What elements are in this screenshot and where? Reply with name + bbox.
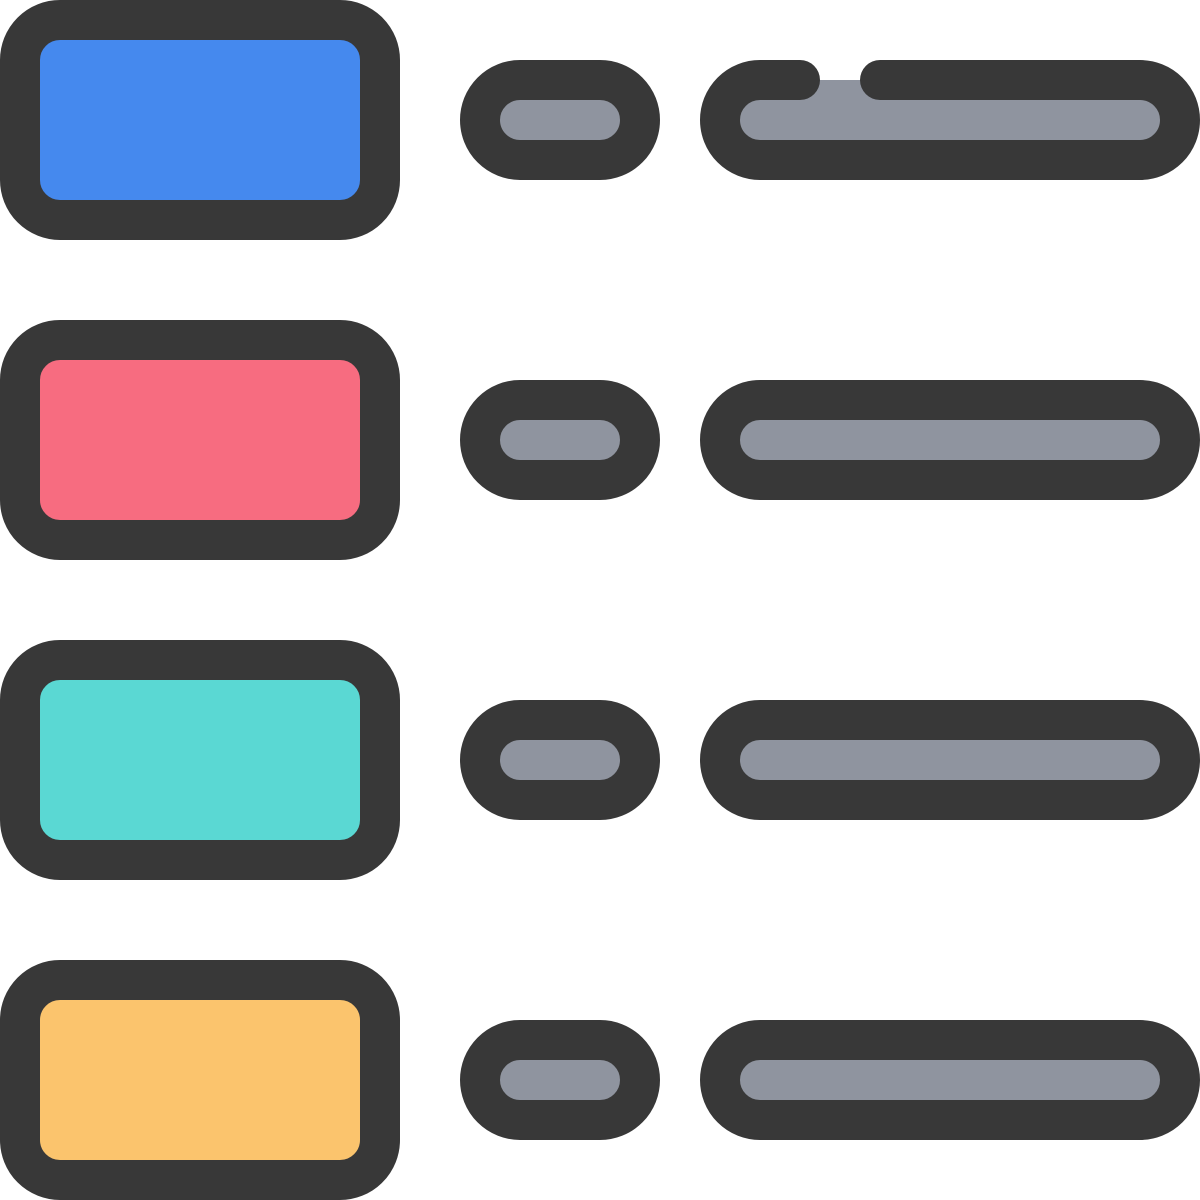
row 3 <box>20 660 1180 860</box>
long pill <box>720 720 1180 800</box>
long pill <box>720 400 1180 480</box>
color block: red <box>20 340 380 540</box>
long pill <box>720 1040 1180 1120</box>
row 2 <box>20 340 1180 540</box>
short pill <box>480 80 640 160</box>
color block: teal <box>20 660 380 860</box>
short pill <box>480 1040 640 1120</box>
color block: yellow <box>20 980 380 1180</box>
short pill <box>480 400 640 480</box>
short pill <box>480 720 640 800</box>
row 4 <box>20 980 1180 1180</box>
row 1 <box>20 20 1180 220</box>
long pill with gap <box>720 80 1180 160</box>
color block: blue <box>20 20 380 220</box>
